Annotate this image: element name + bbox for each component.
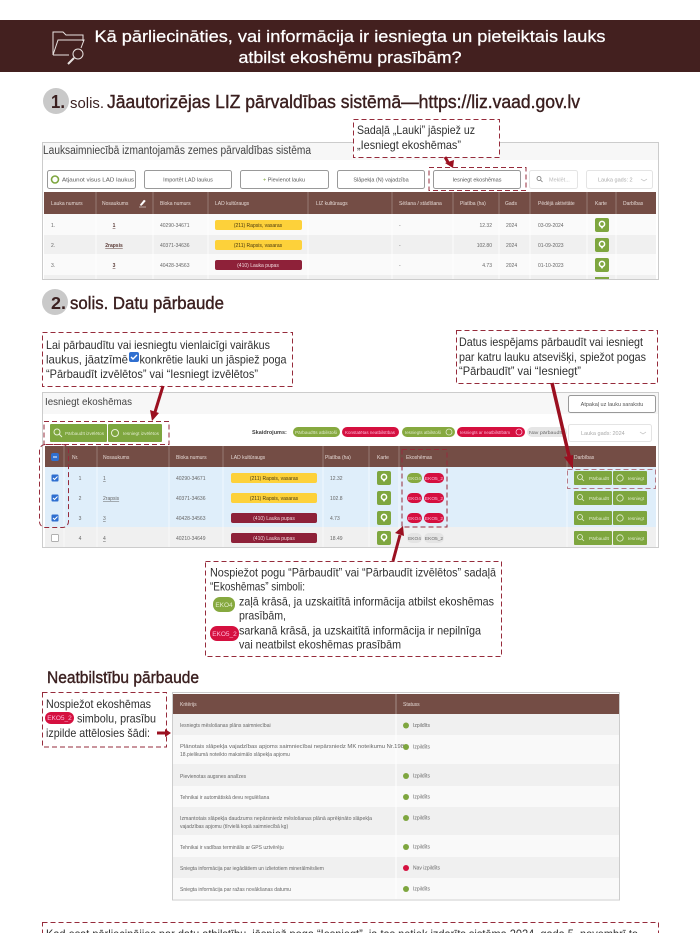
- callout: click symbol: Nospiežot ekoshēmas: [46, 697, 151, 711]
- criteria rows: Tehnikai ir automātiskā devu regulēšana: [180, 795, 269, 801]
- toolbar buttons: + Pievienot lauku: [263, 178, 305, 184]
- year selector: [568, 424, 652, 442]
- callout: go to Lauki section: Sadaļā „Lauki” jāspiež uz: [357, 123, 475, 137]
- toolbar buttons: Lauka gads: 2: [598, 178, 633, 184]
- table rows: 01-10-2023: [538, 263, 564, 269]
- row action buttons: [574, 471, 647, 545]
- arrow: to criteria table: [157, 729, 171, 737]
- title banner: Kā pārliecināties, vai informācija ir iesniegta un pieteiktais lauks: [94, 28, 606, 46]
- heading: step 2: solis. Datu pārbaude: [70, 293, 224, 313]
- table rows: 3: [79, 516, 82, 522]
- bulk action buttons: Iesniegt izvēlētos: [123, 431, 160, 436]
- bulk action buttons: Pārbaudīt izvēlētos: [65, 431, 105, 436]
- table rows: 40371-34636: [176, 496, 206, 502]
- arrow: to bulk action buttons: [150, 386, 163, 421]
- legend: Iesniegts atbilstoši: [405, 430, 441, 435]
- eco-scheme status pills: EKO5_2: [425, 516, 443, 522]
- row action buttons: Iesniegt: [628, 496, 645, 501]
- table header: Pēdējā aktivitāte: [538, 201, 575, 207]
- criteria rows: 18.pielikumā noteikto maksimālo slāpekļa apjomu: [180, 752, 290, 758]
- row action buttons: Pārbaudīt: [589, 476, 610, 481]
- callout: symbol meaning: sarkanā krāsā, ja uzskaitītā informācija ir nepilnīga: [239, 624, 481, 638]
- toolbar buttons: Meklēt...: [549, 178, 570, 184]
- table rows: 12.32: [479, 223, 492, 229]
- table header: LAD kultūraugs: [231, 455, 266, 461]
- table rows: (410) Lauka pupas: [253, 536, 295, 542]
- callout: go to Lauki section: [354, 120, 500, 158]
- callout: check individually: [456, 330, 658, 384]
- table rows: 3.: [51, 263, 55, 269]
- criteria rows: Tehnikai ir vadības terminālis ar GPS uztvērēju: [180, 845, 284, 851]
- callout: final submission note: [42, 922, 658, 933]
- status icons and labels: Izpildīts: [413, 744, 430, 750]
- table header: Karte: [377, 455, 389, 461]
- table rows: 4: [103, 536, 106, 542]
- table rows: 2rapsis: [103, 496, 120, 502]
- toolbar buttons: Atjaunot visus LAD laukus: [62, 178, 134, 184]
- eco-scheme status pills: EKO4: [408, 536, 421, 542]
- table header: Darbības: [623, 201, 644, 207]
- table rows: (211) Rapsis, vasaras: [234, 243, 283, 249]
- row action buttons: Pārbaudīt: [589, 536, 610, 541]
- table rows: 40428-34563: [176, 516, 206, 522]
- callout: click symbol: simbolu, prasību: [77, 712, 156, 726]
- legend: Konstatētas neatbilstības: [345, 430, 396, 435]
- eco-scheme status pills: EKO4: [408, 476, 421, 482]
- table header: [45, 446, 656, 467]
- table header: [44, 192, 656, 214]
- eco-scheme status pills: EKO4: [408, 516, 421, 522]
- table header: Lauka numurs: [51, 201, 83, 207]
- status icons and labels: Izpildīts: [413, 774, 430, 780]
- status icons and labels: Izpildīts: [413, 886, 430, 892]
- arrow: to submit eco-schemes button: [445, 157, 449, 164]
- callout: select multiple fields: laukus, jāatzīmē: [46, 352, 128, 366]
- highlight: row actions: [568, 470, 656, 488]
- heading: step 1: Jāautorizējas LIZ pārvaldības sistēmā—https://liz.vaad.gov.lv: [107, 92, 580, 112]
- callout: check individually: par katru lauku atsevišķi, spiežot pogas: [459, 350, 646, 364]
- table header: Karte: [595, 201, 607, 207]
- callout: check individually: Datus iespējams pārbaudīt vai iesniegt: [459, 335, 644, 349]
- table rows: -: [399, 223, 401, 229]
- table header: Platība (ha): [325, 455, 351, 461]
- criteria rows: Iesniegts mēslošanas plāns saimniecībai: [180, 723, 271, 729]
- table rows: 4: [79, 536, 82, 542]
- toolbar buttons: Slāpekļa (N) vajadzība: [353, 178, 410, 184]
- toolbar buttons: Importēt LAD laukus: [163, 178, 213, 184]
- table rows: [45, 467, 656, 547]
- callout: symbol meaning: vai neatbilst ekoshēmas prasībām: [239, 638, 401, 652]
- heading: step 1: 1.: [51, 92, 65, 112]
- callout: select multiple fields: [42, 332, 292, 386]
- heading: non-compliance check: Neatbilstību pārbaude: [47, 669, 199, 687]
- bulk action buttons: [50, 424, 162, 442]
- legend: Pārbaudīts atbilstoši: [295, 430, 337, 435]
- eco-scheme status pills: EKO4: [408, 496, 421, 502]
- criteria rows: vajadzības apjomu (tīrvielā kopā saimniecībā kg): [180, 824, 288, 830]
- table rows: [44, 214, 656, 279]
- highlight: bulk action buttons: [44, 422, 169, 444]
- table header: Nr.: [72, 455, 78, 461]
- table rows: -: [399, 263, 401, 269]
- table rows: 2rapsis: [105, 243, 123, 249]
- arrow: to eco-scheme column: [393, 526, 404, 561]
- table rows: 1: [103, 476, 106, 482]
- legend: Skaidrojums:: [252, 430, 287, 436]
- legend: [252, 427, 567, 437]
- title banner: [0, 20, 700, 72]
- callout: symbol meaning: [206, 562, 502, 656]
- icons: map buttons: [377, 471, 391, 545]
- table rows: (211) Rapsis, vasaras: [250, 476, 299, 482]
- status icons and labels: Izpildīts: [413, 794, 430, 800]
- table rows: 40428-34563: [160, 263, 190, 269]
- title banner: atbilst ekoshēmu prasībām?: [238, 49, 462, 67]
- table rows: 102.80: [477, 243, 492, 249]
- toolbar buttons: Iesniegt ekoshēmas: [453, 178, 502, 184]
- arrow: to row actions: [552, 383, 573, 469]
- callout: symbol meaning: EKO5_2: [212, 631, 237, 638]
- legend: Iesniegts ar neatbilstībām: [460, 430, 510, 435]
- table header: Bloka numurs: [176, 455, 207, 461]
- callout: symbol meaning: EKO4: [215, 602, 233, 609]
- row action buttons: Iesniegt: [628, 516, 645, 521]
- heading: step 2: [42, 289, 224, 315]
- back button: [568, 396, 656, 412]
- callout: symbol meaning: “Ekoshēmas” simboli:: [210, 580, 305, 594]
- eco-scheme status pills: [407, 473, 444, 543]
- callout: symbol meaning: prasībām,: [239, 608, 286, 622]
- table header: Kritērijs: [180, 702, 197, 708]
- criteria rows: Pievienotas augsnes analīzes: [180, 774, 247, 780]
- criteria rows: Izmantotais slāpekļa daudzums nepārsniedz mēslošanas plānā aprēķināto slāpekļa: [180, 816, 372, 822]
- criteria rows: Plānotais slāpekļa vajadzības apjoms saimniecībai nepārsniedz MK noteikumu Nr.198: [180, 744, 404, 750]
- table rows: 40290-34671: [160, 223, 190, 229]
- eco-scheme status pills: EKO5_2: [425, 496, 443, 502]
- heading: step 1: [43, 88, 580, 114]
- table header: Darbības: [574, 455, 595, 461]
- row action buttons: Pārbaudīt: [589, 496, 610, 501]
- status icons and labels: [403, 722, 440, 892]
- table rows: 4.73: [482, 263, 492, 269]
- table rows: 01-09-2023: [538, 243, 564, 249]
- callout: check individually: “Pārbaudīt” vai “Iesniegt”: [459, 364, 581, 378]
- heading: step 2: 2.: [51, 293, 66, 313]
- callout: click symbol: [42, 692, 166, 747]
- status icons and labels: Izpildīts: [413, 816, 430, 822]
- callout: click symbol: izpilde attēlosies šādi:: [46, 726, 150, 740]
- table rows: 1: [79, 476, 82, 482]
- back button: Atpakaļ uz lauku sarakstu: [581, 402, 643, 408]
- icon: folder with magnifier: [53, 32, 84, 64]
- table rows: 1.: [51, 223, 55, 229]
- table rows: 3: [113, 263, 116, 269]
- row action buttons: Pārbaudīt: [589, 516, 610, 521]
- table header: Nosaukums: [102, 201, 129, 207]
- table rows: 2: [79, 496, 82, 502]
- highlight: eco-scheme column: [402, 450, 447, 527]
- panel: land management table: Lauksaimniecībā izmantojamās zemes pārvaldības sistēma: [43, 145, 312, 157]
- criteria rows: Sniegta informācija par ražas novākšanas datumu: [180, 887, 291, 893]
- table rows: 102.8: [330, 496, 343, 502]
- year selector: Lauka gads: 2024: [581, 431, 625, 437]
- table header: Statuss: [403, 702, 420, 708]
- table rows: 2.: [51, 243, 55, 249]
- callout: select multiple fields: konkrētie lauki un jāspiež poga: [140, 352, 287, 366]
- table rows: 40210-34649: [176, 536, 206, 542]
- panel: criteria table: [172, 692, 620, 900]
- heading: step 1: solis.: [70, 95, 104, 112]
- table rows: 1: [113, 223, 116, 229]
- callout: symbol meaning: Nospiežot pogu “Pārbaudīt” vai “Pārbaudīt izvēlētos” sadaļā: [210, 566, 496, 580]
- table header: [173, 694, 619, 714]
- panel: submit eco-schemes table: [42, 392, 658, 548]
- table header: Gads: [505, 201, 517, 207]
- callout: symbol meaning: zaļā krāsā, ja uzskaitītā informācija atbilst ekoshēmas: [239, 594, 494, 608]
- table header: Nosaukums: [103, 455, 130, 461]
- panel: submit eco-schemes table: Iesniegt ekoshēmas: [45, 396, 132, 408]
- table header: Bloka numurs: [160, 201, 191, 207]
- table rows: (211) Rapsis, vasaras: [234, 223, 283, 229]
- table rows: 2024: [506, 243, 517, 249]
- table rows: 2024: [506, 223, 517, 229]
- table header: LAD kultūraugs: [215, 201, 250, 207]
- table rows: 12.32: [330, 476, 343, 482]
- table rows: (410) Lauka pupas: [237, 263, 279, 269]
- table rows: (211) Rapsis, vasaras: [250, 496, 299, 502]
- status icons and labels: Nav izpildīts: [413, 866, 440, 872]
- table rows: 40290-34671: [176, 476, 206, 482]
- toolbar buttons: [48, 170, 652, 188]
- criteria rows: [173, 714, 619, 899]
- highlight: checkbox column: [40, 444, 68, 528]
- row action buttons: Iesniegt: [628, 536, 645, 541]
- table rows: 03-09-2024: [538, 223, 564, 229]
- callout: select multiple fields: “Pārbaudīt izvēlētos” vai “Iesniegt izvēlētos”: [46, 367, 258, 381]
- table rows: 3: [103, 516, 106, 522]
- arrowhead and highlight: submit eco-schemes button: [429, 160, 526, 190]
- status icons and labels: Izpildīts: [413, 723, 430, 729]
- table rows: 40371-34636: [160, 243, 190, 249]
- callout: select multiple fields: Lai pārbaudītu vai iesniegtu vienlaicīgi vairākus: [46, 338, 270, 352]
- table rows: (410) Lauka pupas: [253, 516, 295, 522]
- icons: map buttons: [595, 218, 609, 279]
- callout: click symbol: EKO5_2: [47, 715, 72, 722]
- table rows: 4.73: [330, 516, 340, 522]
- eco-scheme status pills: EKO5_2: [425, 476, 443, 482]
- table header: Ekoshēmas: [406, 455, 433, 461]
- table rows: 2024: [506, 263, 517, 269]
- status icons and labels: Izpildīts: [413, 844, 430, 850]
- table header: LIZ kultūraugs: [316, 201, 348, 207]
- panel: land management table: [42, 142, 658, 280]
- table rows: -: [399, 243, 401, 249]
- table rows: 18.49: [330, 536, 343, 542]
- row action buttons: Iesniegt: [628, 476, 645, 481]
- criteria rows: Sniegta informācija par iegādātiem un izlietotiem minerālmēsliem: [180, 866, 324, 872]
- legend: Nav pārbaudīts: [529, 430, 566, 435]
- table header: Platība (ha): [460, 201, 486, 207]
- table header: Sēšana / stādīšana: [399, 201, 442, 207]
- callout: go to Lauki section: „Iesniegt ekoshēmas”: [357, 138, 461, 152]
- eco-scheme status pills: EKO5_2: [425, 536, 443, 542]
